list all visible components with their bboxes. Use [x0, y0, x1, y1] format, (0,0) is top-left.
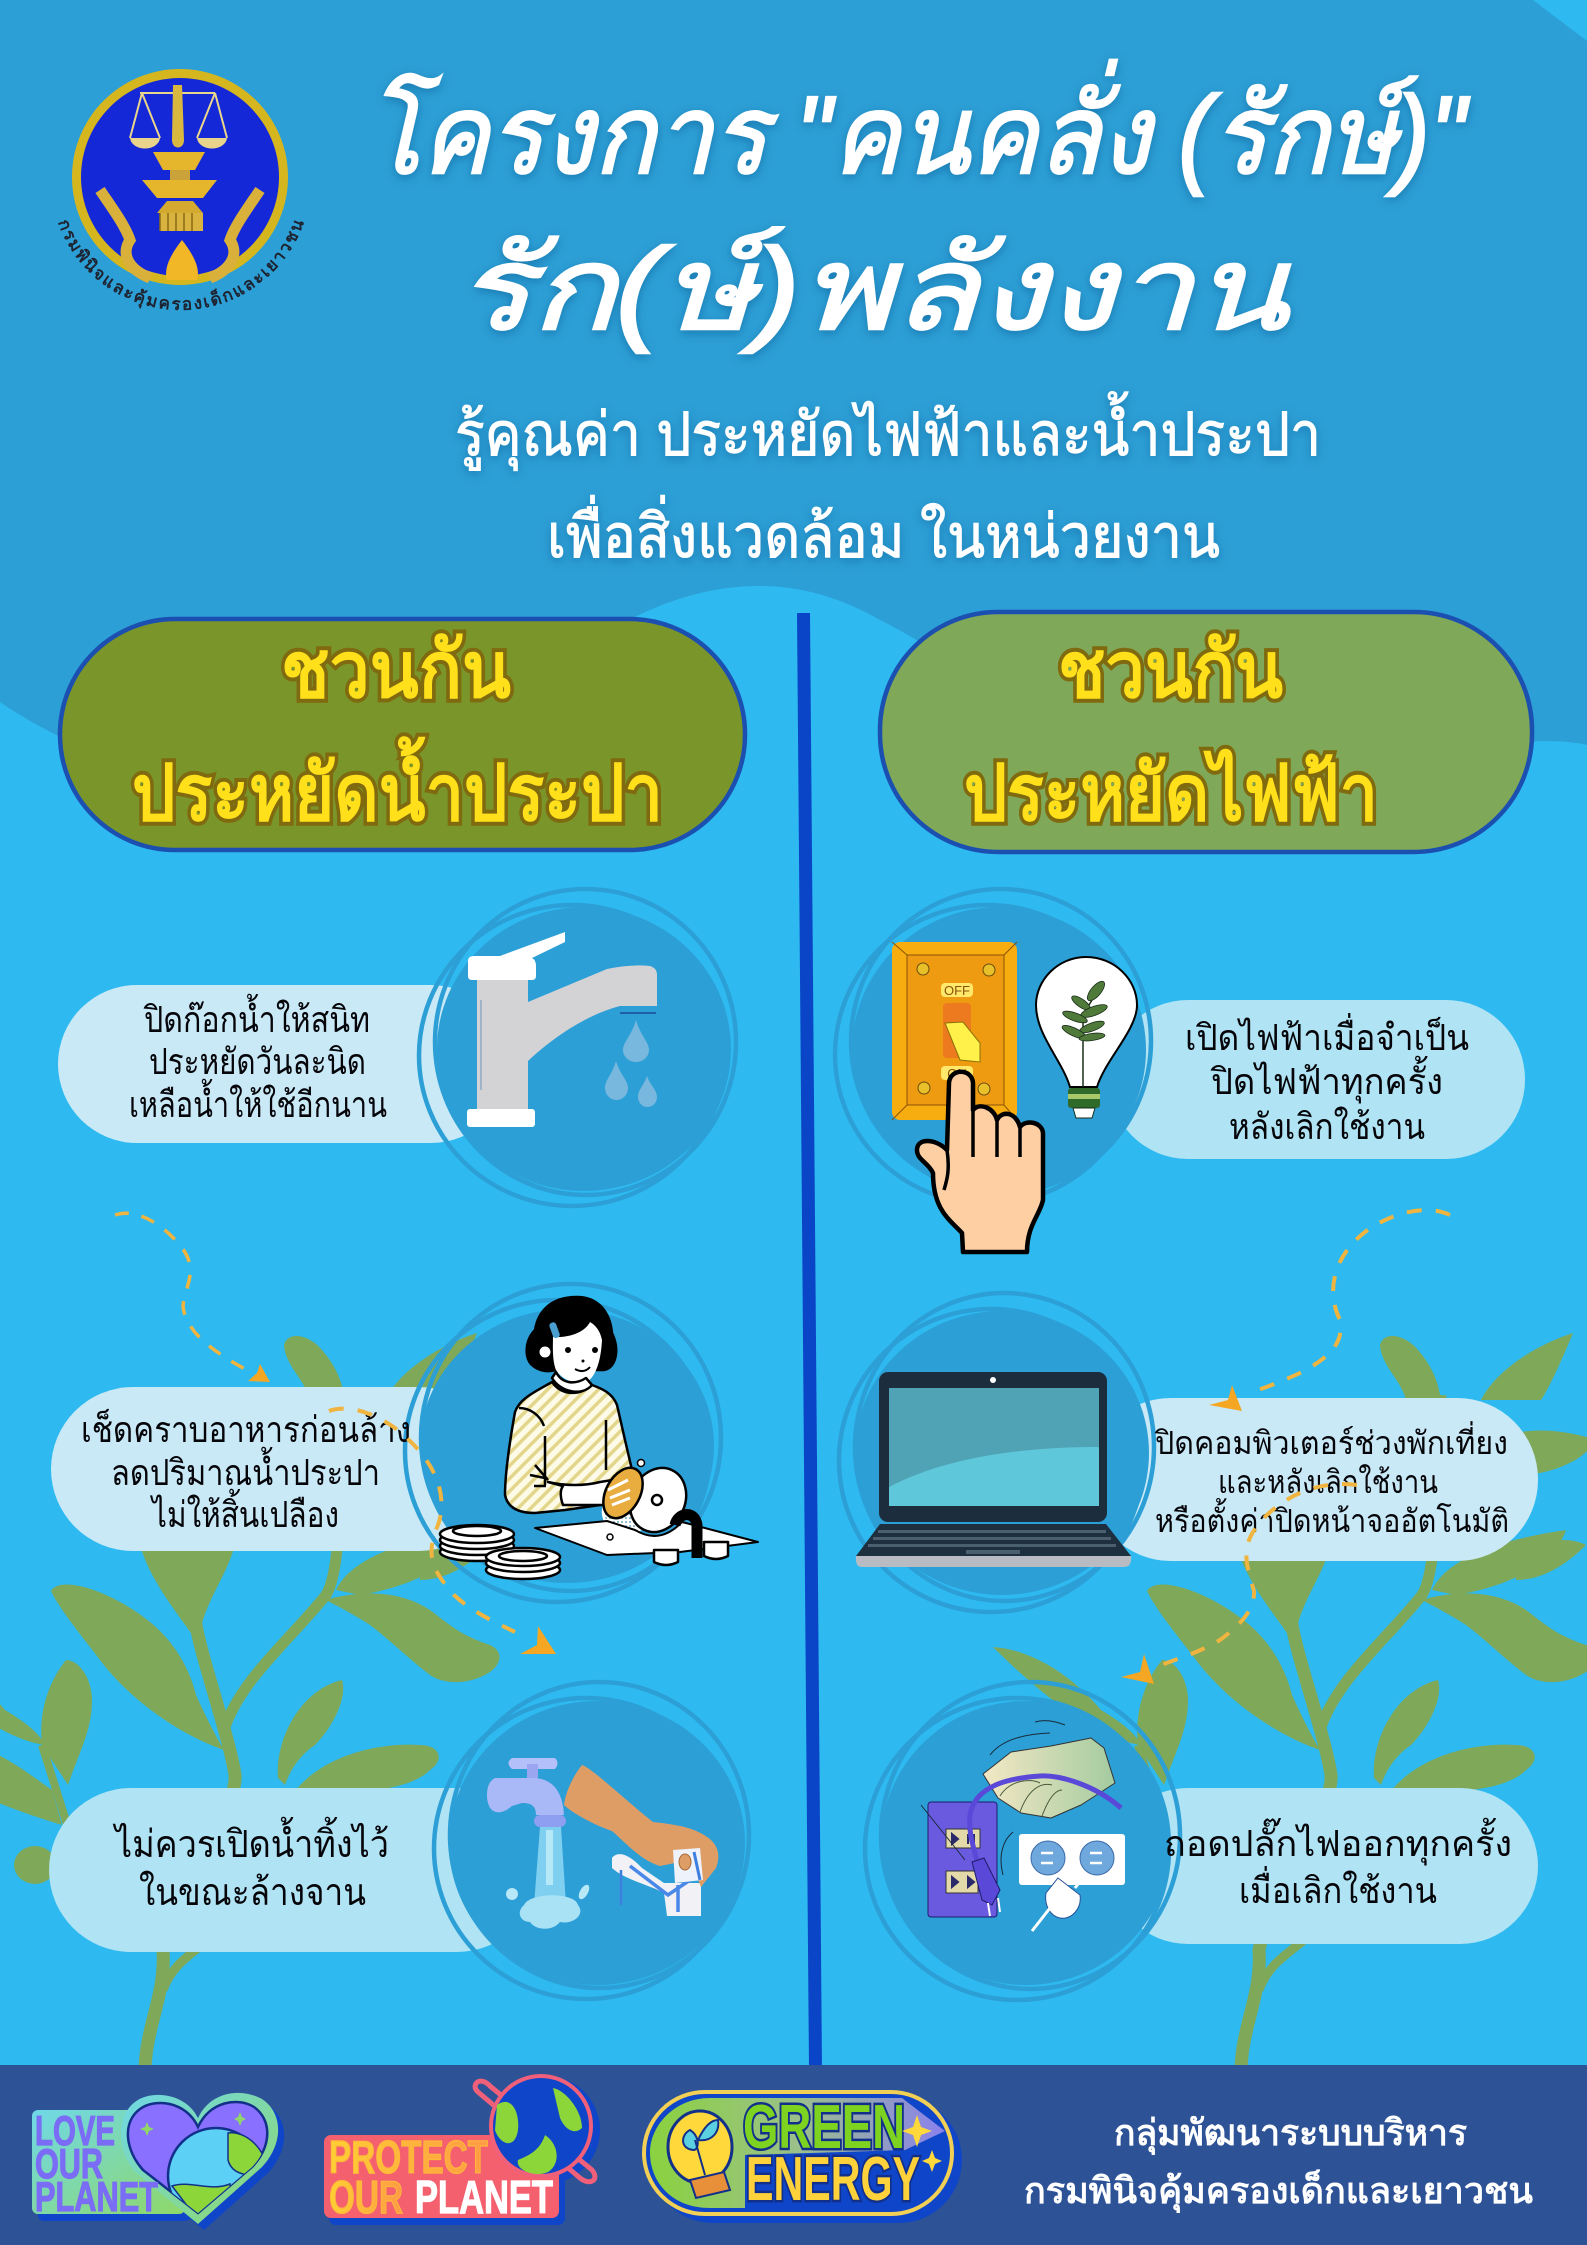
top dark blue wave panel — [0, 0, 1587, 783]
panel: do not leave water running — [49, 1682, 749, 1999]
sticker: protect our planet: PROTECT — [329, 2131, 488, 2183]
text: ไม่ให้สิ้นเปลือง — [150, 1488, 339, 1535]
sticker: love our planet: PLANET — [35, 2173, 158, 2220]
logo: department emblem: กรมพินิจและคุ้มครองเด็กและเยาวชน — [58, 220, 304, 310]
icon: light switch and pointing hand — [892, 942, 1137, 1252]
text: หรือตั้งค่าปิดหน้าจออัตโนมัติ — [1155, 1498, 1509, 1539]
sticker: love our planet: LOVE — [35, 2107, 115, 2154]
title: โครงการ "คนคลั่ง (รักษ์)" — [366, 59, 1471, 197]
footer text: agency name: กลุ่มพัฒนาระบบบริหาร — [1114, 2112, 1468, 2156]
panel: use lights only when needed — [835, 889, 1525, 1252]
title — [366, 59, 1471, 354]
center divider — [797, 613, 822, 2070]
text — [1164, 1817, 1512, 1911]
heading pill: save electricity: ประหยัดไฟฟ้า — [964, 748, 1378, 837]
heading pill: save water: ชวนกัน — [281, 626, 511, 714]
sticker: protect our planet: PLANET — [415, 2171, 553, 2223]
footer text: agency name: กรมพินิจคุ้มครองเด็กและเยาวชน — [1024, 2168, 1533, 2214]
subtitle — [455, 391, 1321, 570]
heading pill: save water — [60, 619, 745, 850]
heading pill: save electricity — [880, 612, 1532, 852]
panel: turn off computer — [839, 1293, 1538, 1612]
text: ลดปริมาณน้ำประปา — [111, 1446, 380, 1493]
icon: light switch and pointing hand: ON — [947, 1066, 967, 1081]
text: เช็ดคราบอาหารก่อนล้าง — [81, 1407, 411, 1450]
text: ปิดก๊อกน้ำให้สนิท — [143, 993, 370, 1040]
footer text: agency name — [1024, 2112, 1533, 2214]
arrow: left bottom — [329, 1409, 556, 1654]
icon: light switch and pointing hand: OFF — [944, 983, 970, 998]
text: และหลังเลิกใช้งาน — [1218, 1464, 1438, 1500]
text: เมื่อเลิกใช้งาน — [1239, 1866, 1437, 1911]
text: ปิดคอมพิวเตอร์ช่วงพักเที่ยง — [1154, 1421, 1508, 1461]
sticker: protect our planet: OUR — [329, 2171, 403, 2223]
subtitle: รู้คุณค่า ประหยัดไฟฟ้าและน้ำประปา — [455, 391, 1321, 471]
text — [1185, 1013, 1469, 1147]
panel: unplug after use — [865, 1682, 1538, 2000]
text: หลังเลิกใช้งาน — [1229, 1106, 1425, 1147]
icon: dripping faucet — [467, 932, 657, 1127]
sticker: green energy — [644, 2092, 962, 2223]
arrow: right bottom — [1121, 1484, 1357, 1684]
sticker: green energy: ENERGY — [746, 2145, 920, 2214]
icon: laptop — [856, 1372, 1131, 1567]
text: ไม่ควรเปิดน้ำทิ้งไว้ — [112, 1816, 389, 1866]
footer bar — [0, 2065, 1587, 2245]
sticker: love our planet: OUR — [35, 2140, 103, 2187]
title: รัก(ษ์)พลังงาน — [456, 224, 1291, 354]
sticker: protect our planet — [324, 2076, 600, 2225]
text: ในขณะล้างจาน — [139, 1871, 366, 1914]
icon: person washing dishes — [440, 1297, 758, 1579]
logo: department emblem — [58, 69, 304, 310]
heading pill: save electricity: ชวนกัน — [1058, 626, 1283, 714]
text — [129, 993, 387, 1125]
arrow: left top — [115, 1213, 270, 1382]
sticker: green energy: GREEN — [743, 2093, 905, 2162]
text — [112, 1816, 389, 1914]
text: ปิดไฟฟ้าทุกครั้ง — [1210, 1055, 1443, 1104]
heading pill: save water: ประหยัดน้ำประปา — [132, 736, 663, 837]
text: เหลือน้ำให้ใช้อีกนาน — [129, 1078, 387, 1125]
decorative plant right — [993, 1333, 1587, 2070]
panel: close the tap tightly — [58, 889, 736, 1206]
arrow: right top — [1209, 1210, 1450, 1411]
text: เปิดไฟฟ้าเมื่อจำเป็น — [1185, 1013, 1469, 1058]
panel: wipe food stains — [51, 1284, 758, 1602]
text: ประหยัดวันละนิด — [149, 1041, 366, 1082]
text — [81, 1407, 411, 1535]
decorative plant left — [0, 1333, 500, 2070]
text: ถอดปลั๊กไฟออกทุกครั้ง — [1164, 1817, 1512, 1866]
icon: unplugging cord — [921, 1721, 1125, 1931]
sticker: love our planet — [32, 2093, 284, 2230]
icon: running tap and hand — [487, 1758, 718, 1929]
text — [1154, 1421, 1509, 1539]
subtitle: เพื่อสิ่งแวดล้อม ในหน่วยงาน — [547, 495, 1220, 570]
